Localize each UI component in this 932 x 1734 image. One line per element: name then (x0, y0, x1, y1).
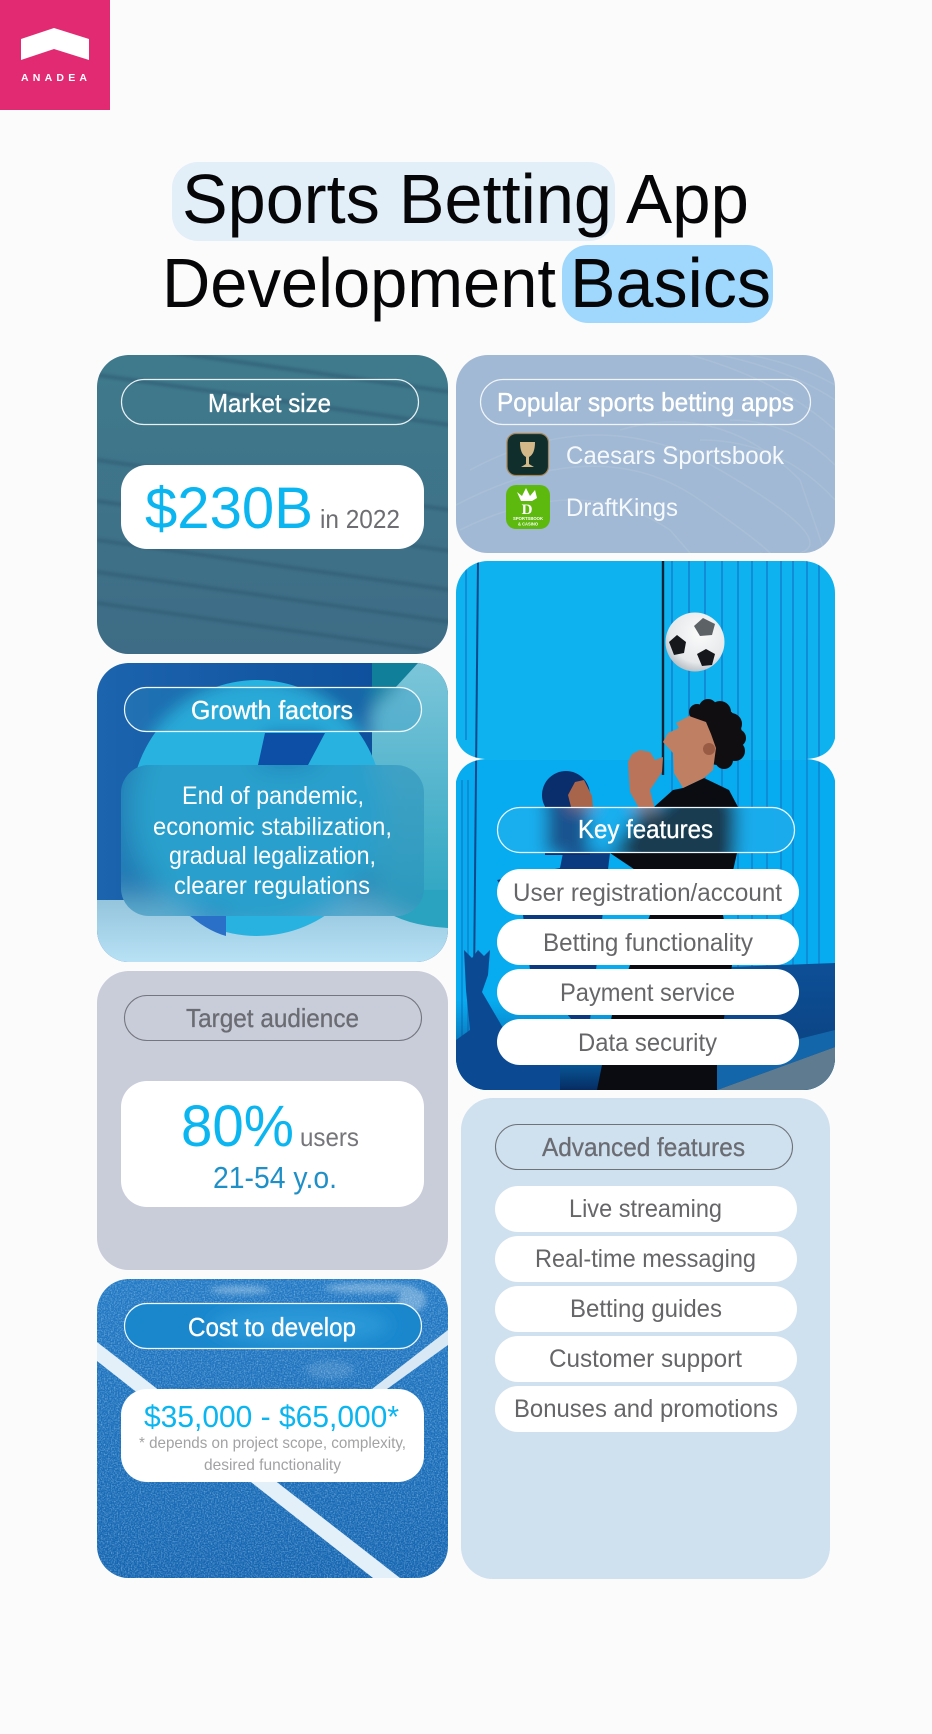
text card: growth factors list: gradual legalization, (169, 842, 376, 870)
icon: DraftKings: & CASINO (518, 522, 539, 526)
list item: payment service (497, 969, 799, 1015)
panel: market size (97, 352, 450, 654)
title (162, 160, 773, 323)
icon: DraftKings: D (522, 502, 533, 518)
list item: real-time messaging (495, 1236, 797, 1282)
text card: growth factors list: clearer regulations (174, 872, 370, 900)
heading: growth factors: Growth factors (191, 695, 353, 725)
icon: DraftKings (506, 485, 550, 529)
heading: cost to develop: Cost to develop (188, 1312, 356, 1342)
panel: advanced features (461, 1098, 830, 1579)
stat card: 80% users 21-54 y.o. (121, 1081, 424, 1207)
panel: popular sports betting apps (456, 355, 835, 556)
list item: bonuses and promotions: Bonuses and promotions (514, 1395, 778, 1423)
heading: cost to develop (124, 1303, 422, 1349)
list item: bonuses and promotions (495, 1386, 797, 1432)
title: App (626, 160, 749, 238)
text card: growth factors list (121, 765, 424, 916)
notch: left cusp (455, 732, 485, 787)
panel: cost to develop (97, 1279, 448, 1578)
list item: customer support (495, 1336, 797, 1382)
heading: advanced features (496, 1124, 792, 1170)
text card: growth factors list: economic stabilization, (153, 813, 392, 841)
list item: data security (497, 1019, 799, 1065)
list item: user registration (497, 869, 799, 915)
heading: target audience (124, 996, 422, 1040)
panel: target audience (97, 971, 448, 1270)
list item: betting functionality (497, 919, 799, 965)
stat card: cost range: desired functionality (204, 1457, 341, 1474)
label: Caesars Sportsbook: Caesars Sportsbook (566, 442, 784, 470)
stat card: $230B in 2022: in 2022 (320, 504, 400, 534)
icon: DraftKings: SPORTSBOOK (513, 516, 544, 521)
list item: data security: Data security (578, 1029, 717, 1057)
title: Sports Betting (182, 160, 612, 238)
list item: real-time messaging: Real-time messaging (535, 1245, 756, 1273)
logo: Anadea: ANADEA (21, 72, 87, 84)
heading: market size (122, 380, 418, 424)
stat card: $230B in 2022: $230B (145, 476, 313, 541)
stat card: 80% users 21-54 y.o.: users (300, 1122, 359, 1152)
stat card: cost range: $35,000 - $65,000* (144, 1399, 399, 1434)
heading: growth factors (124, 686, 422, 732)
panel: key features photo (455, 561, 836, 1090)
heading: advanced features: Advanced features (542, 1132, 745, 1162)
panel: growth factors (97, 663, 448, 962)
heading: popular sports betting apps (480, 380, 810, 424)
text card: growth factors list: End of pandemic, (182, 782, 364, 810)
list item: live streaming: Live streaming (569, 1195, 722, 1223)
logo: Anadea (0, 0, 110, 110)
list item: user registration: User registration/account (513, 879, 782, 907)
stat card: cost range (121, 1389, 424, 1482)
list item: betting guides (495, 1286, 797, 1332)
stat card: $230B in 2022 (121, 465, 424, 549)
notch: right cusp (807, 732, 836, 787)
stat card: cost range: * depends on project scope, complexity, (139, 1435, 406, 1452)
heading: market size: Market size (208, 388, 331, 418)
list item: betting functionality: Betting functionality (543, 929, 753, 957)
list item: customer support: Customer support (549, 1345, 742, 1373)
heading: key features (496, 806, 796, 854)
heading: popular sports betting apps: Popular sports betting apps (497, 387, 794, 417)
icon: Caesars Sportsbook (507, 434, 548, 476)
title: Basics (570, 244, 771, 322)
label: DraftKings: DraftKings (566, 494, 678, 522)
list item: payment service: Payment service (560, 979, 735, 1007)
list item: live streaming (495, 1186, 797, 1232)
heading: key features: Key features (578, 814, 713, 844)
stat card: 80% users 21-54 y.o.: 80% (181, 1094, 294, 1159)
title: Development (162, 244, 556, 322)
stat card: 80% users 21-54 y.o.: 21-54 y.o. (213, 1160, 337, 1195)
list item: betting guides: Betting guides (570, 1295, 722, 1323)
heading: target audience: Target audience (186, 1003, 359, 1033)
